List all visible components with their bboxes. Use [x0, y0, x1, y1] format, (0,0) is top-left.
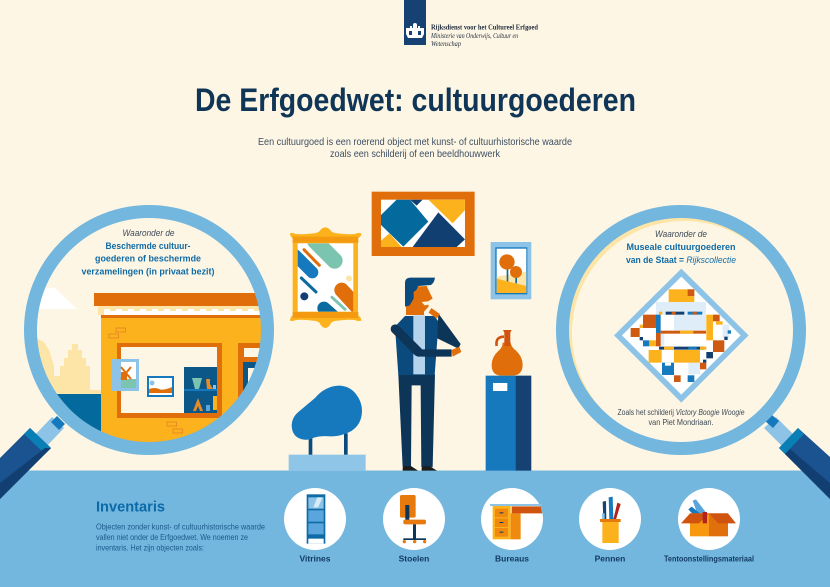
caption: Victory Boogie Woogie: van Piet Mondriaan.: [648, 418, 714, 427]
magnifier ring right: [562, 212, 800, 448]
scene: museum building: [36, 287, 268, 450]
raised arm: [437, 313, 461, 349]
icon: vitrines: [284, 488, 346, 564]
man looking at art: [395, 278, 461, 471]
picture: windmill: [112, 359, 139, 391]
inventaris text block: inventaris. Het zijn objecten zoals:: [96, 542, 204, 552]
mouth: [422, 301, 429, 305]
subtitle: Een cultuurgoed is een roerend object met kunst- of cultuurhistorische waarde: [258, 136, 572, 148]
neck and head: [406, 286, 433, 315]
lowered arm: [395, 329, 418, 352]
icon: pennen: [579, 488, 641, 564]
shirt: [413, 315, 425, 374]
floor band: [0, 470, 830, 587]
label: bureaus: Bureaus: [495, 554, 529, 564]
magnifier ring left: [30, 212, 268, 448]
water: [57, 394, 101, 432]
inventaris text block: [96, 500, 265, 552]
icon: stoelen: [383, 488, 445, 564]
logo: Rijksdienst voor het Cultureel Erfgoed: Ministerie van Onderwijs, Cultuur en: [430, 32, 518, 40]
icon: tentoonstellingsmateriaal: [664, 488, 754, 564]
icon: bureaus: [481, 488, 543, 564]
large window: [117, 343, 222, 418]
caption: Victory Boogie Woogie: [618, 408, 745, 427]
jacket: [395, 316, 439, 375]
magnifier handle right: [764, 415, 830, 499]
magnifier handle left: [0, 416, 65, 499]
vase on pedestal: [486, 330, 531, 471]
shoes: [403, 466, 437, 471]
label: museale cultuurgoederen: van de Staat = Rijkscollectie: [626, 255, 736, 266]
cloud: [36, 287, 77, 309]
caption: Victory Boogie Woogie: Zoals het schilderij Victory Boogie Woogie: [618, 408, 745, 417]
title: De Erfgoedwet: cultuurgoederen: [195, 82, 636, 118]
label: beschermde cultuurgoederen: goederen of beschermde: [95, 254, 201, 264]
magnifier: museale cultuurgoederen: [562, 212, 830, 499]
label: beschermde cultuurgoederen: verzamelingen (in privaat bezit): [82, 266, 214, 276]
inventaris text block: vallen niet onder de Erfgoedwet. We noemen ze: [96, 532, 248, 542]
bricks: [109, 328, 182, 433]
label: beschermde cultuurgoederen: [82, 228, 214, 276]
logo: Rijksdienst voor het Cultureel Erfgoed: Wetenschap: [431, 40, 461, 48]
logo: Rijksdienst voor het Cultureel Erfgoed: Rijksdienst voor het Cultureel Erfgoed: [431, 22, 539, 32]
legs: [398, 374, 435, 467]
roof dentils: [104, 309, 260, 315]
subtitle: zoals een schilderij of een beeldhouwwerk: [330, 148, 501, 160]
label: tentoonstellingsmateriaal: Tentoonstellingsmateriaal: [664, 554, 754, 564]
label: stoelen: Stoelen: [399, 554, 429, 564]
picture: landscape: [147, 376, 174, 397]
label: beschermde cultuurgoederen: Waaronder de: [122, 228, 174, 238]
roof: [94, 293, 264, 306]
building wall: [101, 315, 266, 445]
label: museale cultuurgoederen: [626, 229, 736, 266]
hair: [405, 278, 435, 307]
sculpture on plinth: [289, 386, 366, 471]
crescent: [568, 217, 794, 443]
label: pennen: Pennen: [595, 554, 625, 564]
subtitle: [258, 136, 572, 160]
label: vitrines: Vitrines: [299, 554, 331, 564]
label: museale cultuurgoederen: Waaronder de: [655, 229, 707, 239]
inventaris text block: Inventaris: [96, 500, 165, 516]
skyline: [37, 338, 101, 394]
central museum scene: [289, 192, 531, 471]
display cabinet: [184, 367, 217, 413]
painting: orange frame: [372, 192, 475, 256]
magnifier: beschermde cultuurgoederen: [0, 212, 268, 499]
label: beschermde cultuurgoederen: Beschermde cultuur-: [106, 241, 190, 251]
label: museale cultuurgoederen: Museale cultuurgoederen: [626, 242, 736, 253]
logo: Rijksdienst voor het Cultureel Erfgoed: [404, 0, 539, 48]
painting: gold frame: [290, 227, 361, 328]
painting: Victory Boogie Woogie: [614, 269, 749, 403]
hands: [429, 308, 440, 319]
second window: [238, 343, 260, 398]
inventaris text block: Objecten zonder kunst- of cultuurhistorische waarde: [96, 522, 265, 532]
painting: small landscape: [491, 242, 531, 299]
